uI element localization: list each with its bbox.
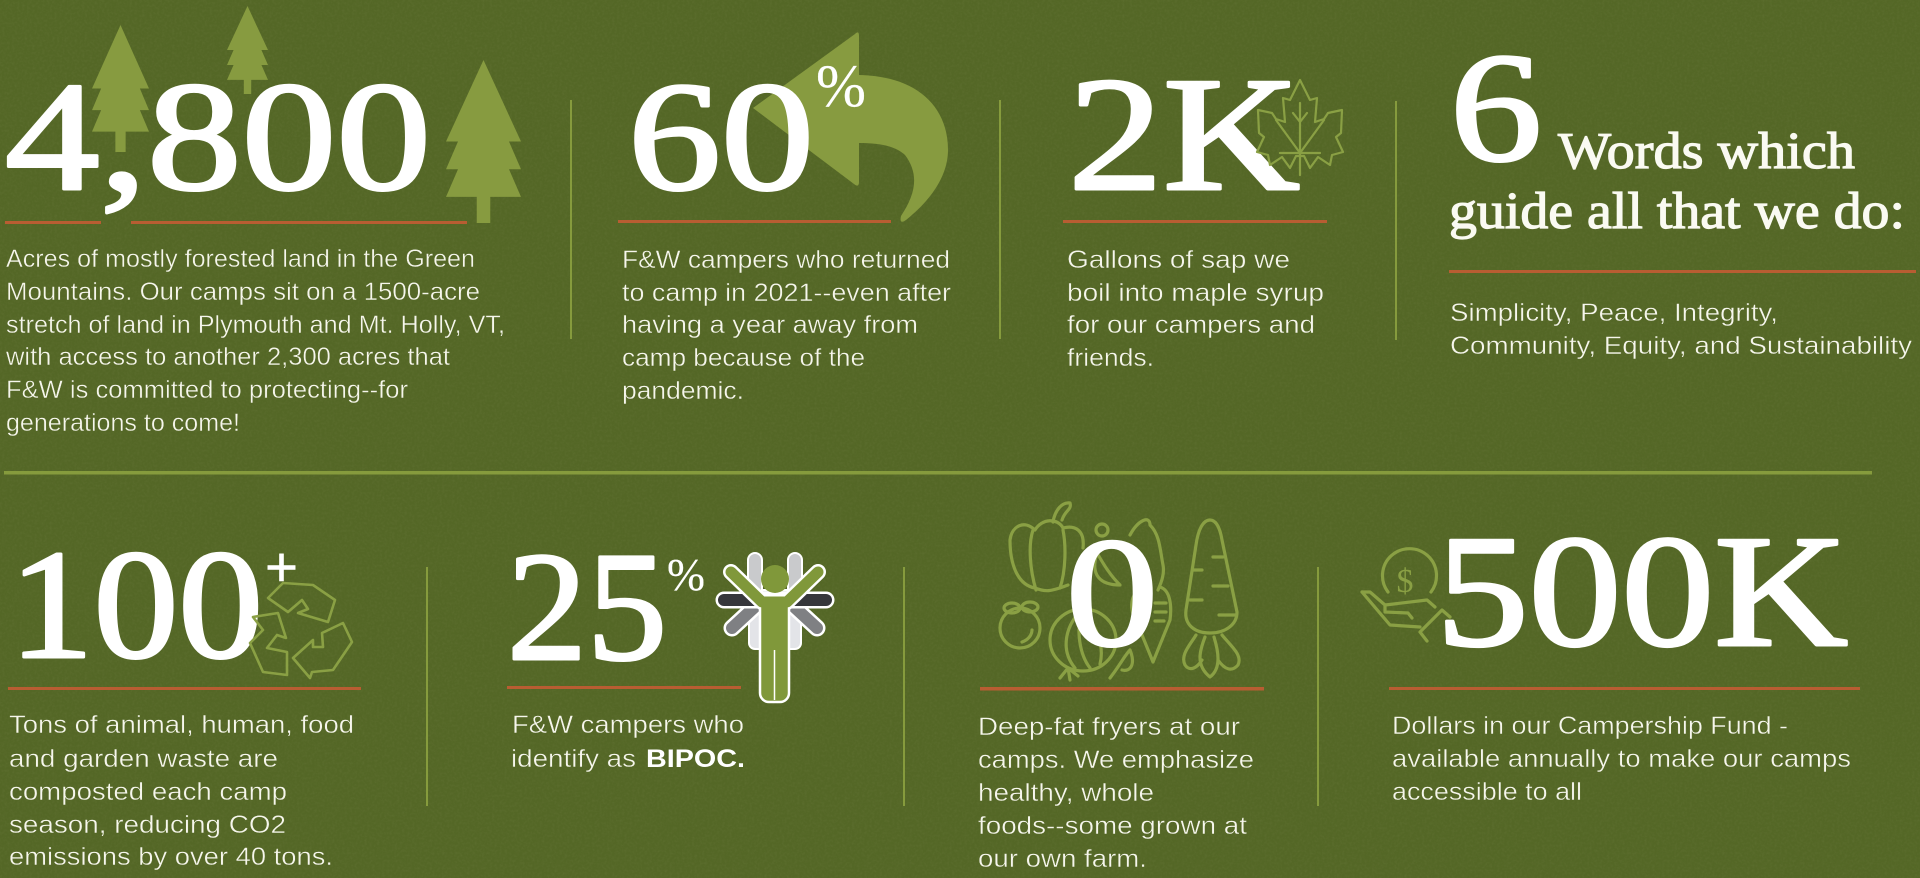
icon: hand holding coin [1362,549,1450,641]
description: Gallons of sap we [1067,246,1290,274]
description: to camp in 2021--even after [622,279,951,307]
statistic: 100: 100 [9,518,263,691]
divider [1317,567,1319,806]
description [622,246,951,405]
statistic: 6: 6 [1450,21,1542,194]
panel: 6 words [1449,21,1916,360]
description [1450,299,1913,360]
description: available annually to make our camps [1392,745,1851,773]
description [1392,712,1851,806]
red rule [8,687,361,690]
description: Tons of animal, human, food [9,711,354,739]
icon: tree top [227,6,268,94]
description: boil into maple syrup [1067,279,1324,307]
icon: tree left [92,25,149,152]
description: healthy, whole [978,779,1154,807]
red rule [980,687,1264,690]
icon: vegetables [1000,503,1239,680]
statistic: 500K: 500K [1436,502,1848,680]
divider [570,100,572,339]
divider [1395,101,1397,340]
percent sign: % [667,550,705,600]
heading line 1: Words which [1558,123,1855,180]
horizontal divider [4,471,1872,474]
description: friends. [1067,344,1154,372]
divider [999,100,1001,339]
panel: 2K [1063,45,1343,372]
description: camp because of the [622,344,865,372]
red rule [618,220,891,223]
description: accessible to all [1392,778,1582,806]
icon: recycling arrows [250,583,352,678]
description: stretch of land in Plymouth and Mt. Holly, VT, [6,311,505,339]
panel: 4,800 acres [5,6,521,437]
description [511,711,745,773]
plus sign: + [265,535,298,598]
statistic: 25: 25 [507,520,667,693]
description: for our campers and [1067,311,1315,339]
statistic: 4,800: 4,800 [5,50,431,223]
red rule [507,686,741,689]
red rule [1389,687,1860,690]
red rule left [5,221,101,224]
statistic: 0: 0 [1066,506,1158,679]
heading line 2: guide all that we do: [1449,183,1905,240]
description: with access to another 2,300 acres that [5,343,450,371]
description: Mountains. Our camps sit on a 1500-acre [6,278,480,306]
description: having a year away from [622,311,918,339]
panel: 0 fryers [978,503,1264,873]
panel: 60% [618,32,951,405]
description: generations to come! [6,409,240,437]
red rule [1449,270,1916,273]
red rule right [131,221,467,224]
description: Acres of mostly forested land in the Green [6,245,475,273]
description: Simplicity, Peace, Integrity, [1450,299,1778,327]
description [5,245,505,437]
dollar sign: $ [1396,563,1414,600]
icon: tree right [446,60,521,223]
description [9,711,354,871]
description: foods--some grown at [978,812,1247,840]
description: season, reducing CO2 [9,811,286,839]
description: Dollars in our Campership Fund - [1392,712,1788,740]
red rule [1063,220,1327,223]
description [978,713,1254,873]
description: composted each camp [9,778,287,806]
description: and garden waste are [9,745,278,773]
icon: maple leaf [1257,80,1343,175]
divider [903,567,905,806]
description: F&W is committed to protecting--for [6,376,408,404]
divider [426,567,428,806]
description: our own farm. [978,845,1147,873]
description: identify as [511,745,636,773]
panel: 100+ tons [8,518,361,871]
description: pandemic. [622,377,744,405]
description: emissions by over 40 tons. [9,843,333,871]
description: F&W campers who [512,711,744,739]
description [1067,246,1324,372]
icon: person with arms raised [724,553,826,702]
description: Community, Equity, and Sustainability [1450,332,1913,360]
description: camps. We emphasize [978,746,1254,774]
icon: return arrow [753,32,948,222]
description: F&W campers who returned [622,246,950,274]
description: Deep-fat fryers at our [978,713,1240,741]
percent sign: % [816,53,866,119]
panel: 25% [507,520,826,773]
panel: 500K [1362,502,1860,806]
statistic: 2K: 2K [1068,45,1300,225]
description: BIPOC. [646,745,745,773]
statistic: 60: 60 [628,50,814,223]
